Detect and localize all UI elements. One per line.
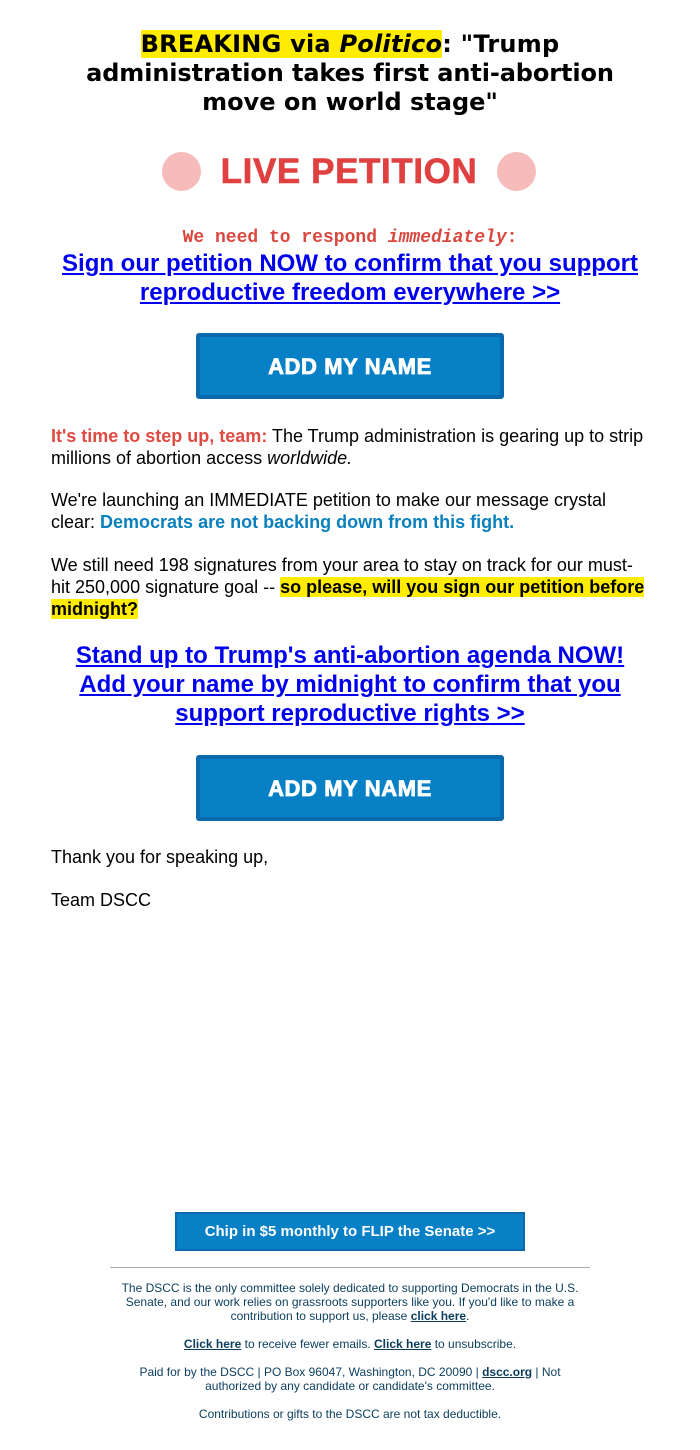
paragraph 2: clear: Democrats are not backing down from this fight.: [51, 512, 514, 532]
paragraph 3: [51, 555, 644, 619]
sign-off: Team DSCC: [51, 890, 151, 910]
paragraph 3: hit 250,000 signature goal -- so please, will you sign our petition before: [51, 577, 644, 597]
footer: about: The DSCC is the only committee solely dedicated to supporting Democrats in the U.S.: [122, 1281, 578, 1295]
petition link: [62, 250, 638, 306]
footer: tax note: Contributions or gifts to the DSCC are not tax deductible.: [199, 1407, 501, 1421]
footer: about: Senate, and our work relies on grassroots supporters like you. If you'd like to make a: [126, 1295, 574, 1309]
button: add my name: ADD MY NAME: [268, 776, 432, 801]
footer: paid for by: Paid for by the DSCC | PO Box 96047, Washington, DC 20090 | dscc.org | Not: [139, 1365, 561, 1379]
footer: paid for by: [139, 1365, 561, 1393]
button: add my name: [196, 333, 504, 399]
footer: paid for by: authorized by any candidate or candidate's committee.: [205, 1379, 495, 1393]
button: chip in: [175, 1212, 525, 1251]
paragraph 2: [51, 490, 606, 532]
sign-off: Thank you for speaking up,: [51, 847, 268, 867]
title: move on world stage": [202, 88, 498, 116]
red subheading: We need to respond immediately:: [183, 228, 517, 248]
title: administration takes first anti-abortion: [86, 59, 614, 87]
paragraph 2: We're launching an IMMEDIATE petition to make our message crystal: [51, 490, 606, 510]
title: BREAKING via Politico: "Trump: [141, 30, 559, 58]
stand up link: [76, 642, 624, 727]
icon: right circle: [497, 152, 536, 191]
paragraph 3: We still need 198 signatures from your area to stay on track for our must-: [51, 555, 633, 575]
button: add my name: [196, 755, 504, 821]
footer: [110, 1267, 590, 1421]
footer: about: [122, 1281, 578, 1323]
paragraph 1: It's time to step up, team: The Trump administration is gearing up to strip: [51, 426, 643, 446]
paragraph 1: millions of abortion access worldwide.: [51, 448, 352, 468]
footer: email preferences: Click here to receive fewer emails. Click here to unsubscribe.: [184, 1337, 516, 1351]
footer: about: contribution to support us, please click here.: [231, 1309, 469, 1323]
paragraph 3: midnight?: [51, 599, 138, 619]
stand up link: Stand up to Trump's anti-abortion agenda NOW!: [76, 642, 624, 669]
title: [86, 30, 614, 116]
icon: left circle: [162, 152, 201, 191]
button: add my name: ADD MY NAME: [268, 354, 432, 379]
live petition label: LIVE PETITION: [221, 152, 477, 191]
petition link: Sign our petition NOW to confirm that you support: [62, 250, 638, 277]
paragraph 1: [51, 426, 643, 468]
sign-off: [51, 847, 268, 910]
button: chip in: Chip in $5 monthly to FLIP the Senate >>: [205, 1223, 495, 1240]
live petition banner: [162, 152, 536, 191]
stand up link: support reproductive rights >>: [175, 700, 525, 727]
stand up link: Add your name by midnight to confirm that you: [79, 671, 621, 698]
petition link: reproductive freedom everywhere >>: [140, 279, 560, 306]
